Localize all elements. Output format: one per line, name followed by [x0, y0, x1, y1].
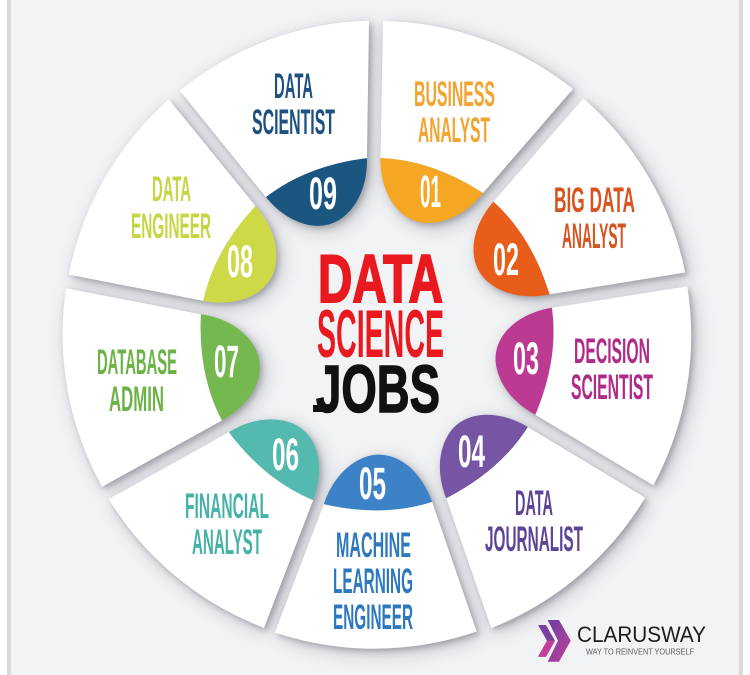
panel: 09 data scientist: SCIENTIST: [252, 103, 335, 142]
panel: 05 machine learning engineer: ENGINEER: [333, 598, 413, 637]
panel: 02 big data analyst: [452, 97, 729, 352]
title: [313, 241, 444, 427]
panel: 01 business analyst: 01: [420, 166, 441, 217]
panel: 06 financial analyst: FINANCIAL: [185, 487, 269, 526]
panel: 08 data engineer: DATA: [152, 170, 191, 209]
panel: 08 data engineer: [68, 87, 285, 312]
panel: 03 decision scientist: 03: [513, 333, 539, 384]
panel: 01 business analyst: BUSINESS: [414, 75, 495, 114]
text: SCIENCE: [317, 296, 444, 372]
panel: 07 database admin: [7, 236, 278, 489]
panel: 09 data scientist: [178, 0, 436, 247]
title: JOBS: [316, 352, 440, 427]
panel: 02 big data analyst: ANALYST: [562, 217, 626, 256]
panel: 02 big data analyst: BIG DATA: [554, 181, 635, 220]
panel: 08 data engineer: ENGINEER: [131, 207, 211, 246]
panel: 09 data scientist: DATA: [274, 67, 313, 106]
panel: 06 financial analyst: ANALYST: [192, 523, 262, 562]
right frame line: [739, 0, 743, 675]
panel: 04 data journalist: [401, 394, 646, 662]
panel: 04 data journalist: DATA: [515, 484, 553, 523]
panel: 07 database admin: 07: [214, 336, 239, 387]
panel: 04 data journalist: 04: [458, 426, 485, 477]
panel: 05 machine learning engineer: [239, 441, 479, 675]
panel: 06 financial analyst: [85, 401, 335, 629]
panel: 09 data scientist: 09: [309, 168, 337, 219]
panel: 01 business analyst: [380, 21, 573, 223]
panel: 04 data journalist: JOURNALIST: [485, 520, 583, 559]
left frame line: [7, 0, 11, 675]
title: DATA: [318, 241, 443, 317]
panel: 03 decision scientist: [488, 284, 720, 503]
panel: 02 big data analyst: 02: [493, 234, 519, 285]
logo: clarusway: [538, 620, 706, 662]
icon: chevrons: [538, 620, 571, 662]
panel: 07 database admin: DATABASE: [97, 343, 177, 382]
panel: 05 machine learning engineer: LEARNING: [333, 562, 413, 601]
panel: 05 machine learning engineer: MACHINE: [336, 526, 411, 565]
panel: 05 machine learning engineer: 05: [359, 458, 386, 509]
logo wordmark: CLARUSWAY: [577, 622, 706, 647]
panel: 08 data engineer: 08: [227, 236, 253, 287]
panel: 03 decision scientist: DECISION: [574, 332, 650, 371]
logo tagline: WAY TO REINVENT YOURSELF: [586, 648, 694, 656]
panel: 07 database admin: ADMIN: [109, 380, 164, 419]
panel: 01 business analyst: ANALYST: [418, 111, 490, 150]
panel: 03 decision scientist: SCIENTIST: [571, 368, 653, 407]
panel: 06 financial analyst: 06: [272, 429, 299, 480]
